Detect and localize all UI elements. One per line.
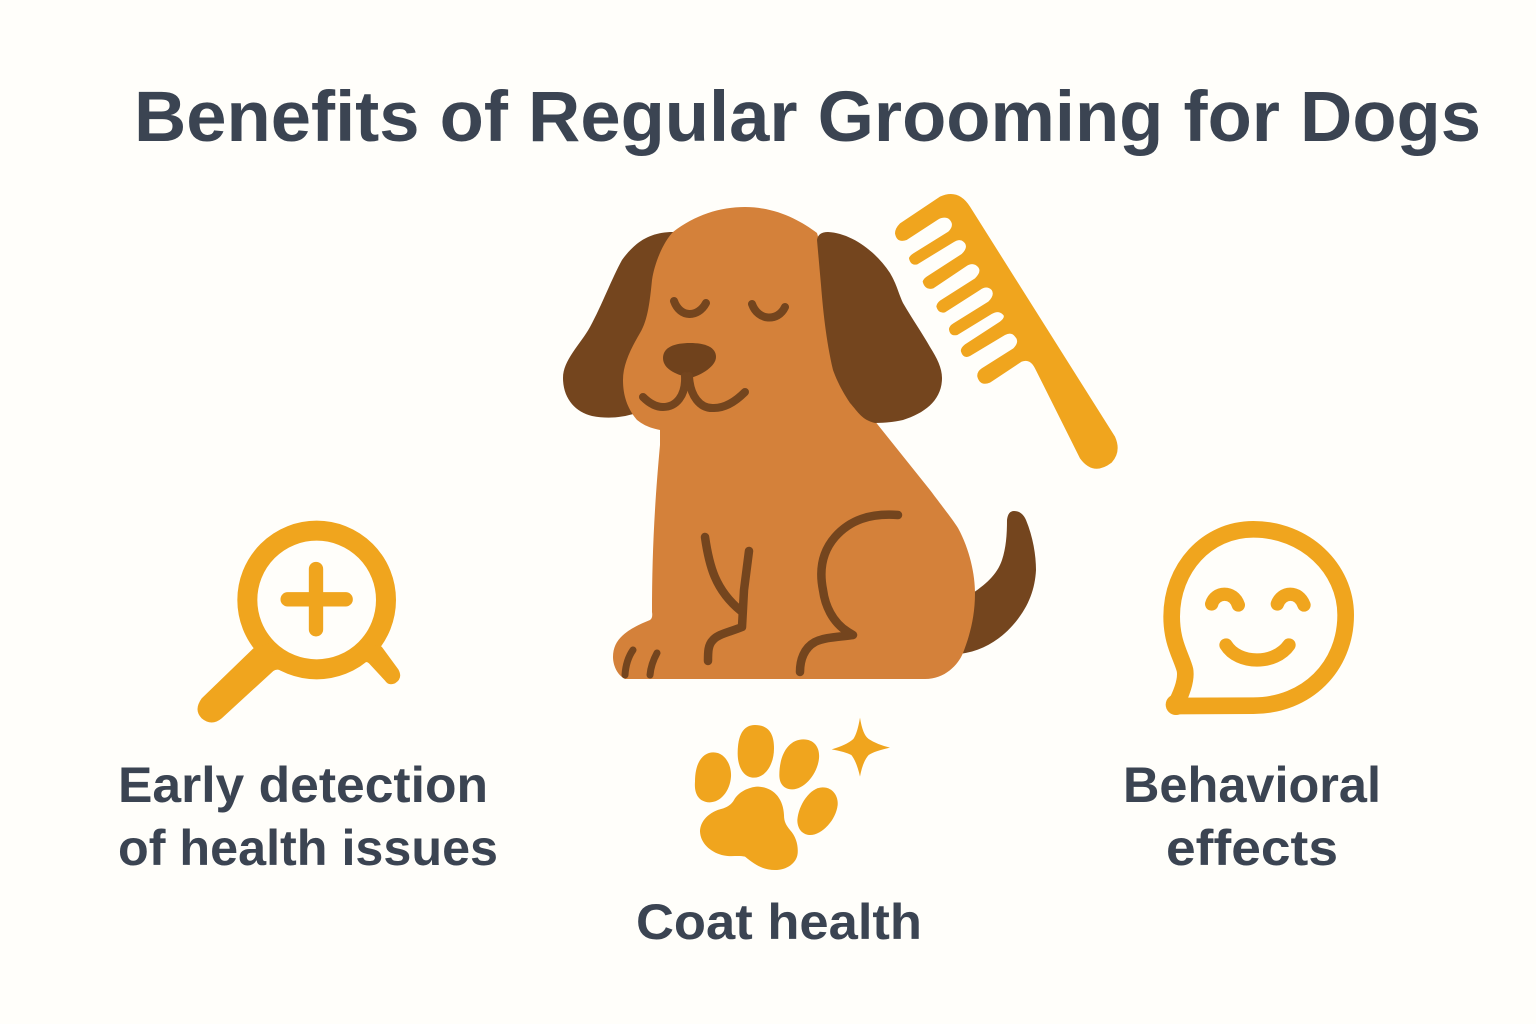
dog nose — [663, 343, 716, 378]
icon: magnifying glass with plus — [197, 531, 400, 722]
label: behavioral effects — [1123, 757, 1381, 876]
label: behavioral effects: effects — [1166, 820, 1338, 876]
icon: paw with sparkle — [695, 718, 890, 870]
label: early detection — [118, 757, 498, 876]
label: early detection: Early detection — [118, 757, 488, 813]
label: behavioral effects: Behavioral — [1123, 757, 1381, 813]
label: coat health: Coat health — [636, 894, 922, 950]
icon: comb — [895, 194, 1118, 469]
dog right ear — [817, 232, 942, 423]
icon: smiling speech bubble — [1166, 529, 1346, 715]
dog left ear — [563, 232, 680, 418]
label: early detection: of health issues — [118, 820, 498, 876]
dog body — [613, 207, 975, 679]
dog closed eyes — [674, 301, 785, 318]
dog leg and paw lines — [625, 515, 898, 675]
dog tail — [960, 511, 1036, 654]
illustration: dog — [563, 207, 1036, 679]
title: Benefits of Regular Grooming for Dogs — [134, 78, 1481, 157]
dog mouth — [643, 376, 745, 408]
